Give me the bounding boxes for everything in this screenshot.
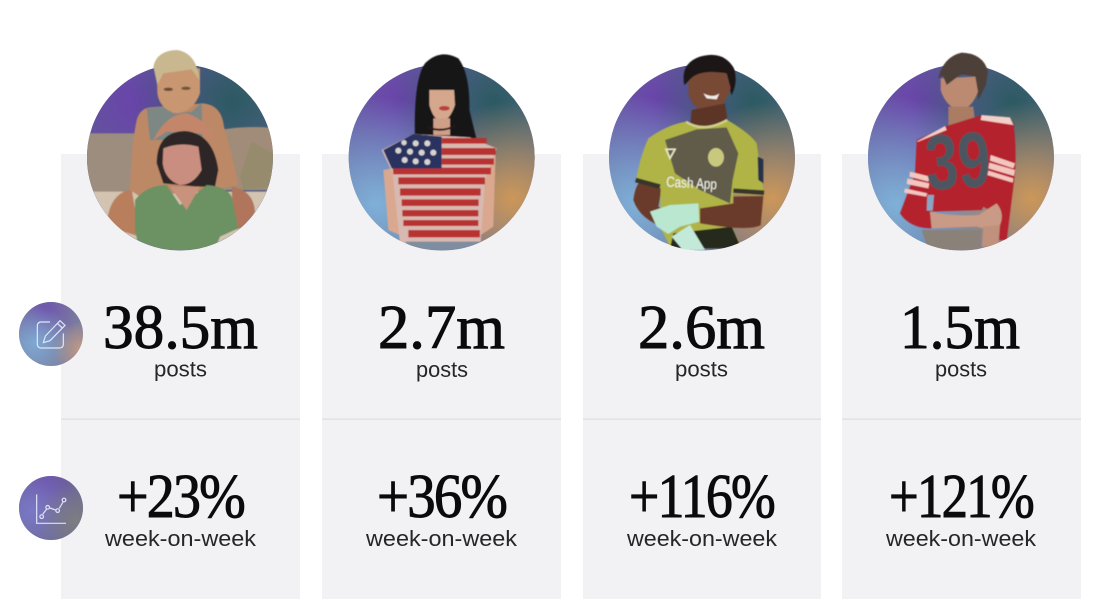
- panel background: [583, 154, 821, 599]
- stat: week-on-week: week-on-week: [626, 526, 778, 551]
- stat: posts: posts: [935, 356, 987, 382]
- panel background: [842, 154, 1081, 599]
- column 3: third trend: [583, 55, 821, 599]
- portrait: woman in red 39 sweater: 39: [922, 115, 993, 207]
- stat: posts: posts: [416, 357, 468, 382]
- portrait: goalkeeper in olive jersey: Cash App: [666, 175, 717, 193]
- portrait: model in flag top: [349, 54, 535, 250]
- stat: week-on-week: [626, 463, 778, 551]
- stat: week-on-week: +36%: [377, 463, 506, 531]
- panel background: [322, 154, 561, 599]
- stat: posts: 38.5m: [103, 294, 258, 362]
- stat: posts: 2.7m: [378, 294, 505, 362]
- portrait: two women on a sofa: [85, 50, 277, 257]
- stat: week-on-week: [885, 463, 1037, 551]
- stat: week-on-week: week-on-week: [104, 526, 257, 551]
- stat: posts: posts: [154, 356, 207, 382]
- column 2: second trend: [322, 54, 561, 599]
- stat: week-on-week: week-on-week: [885, 526, 1037, 551]
- portrait: woman in red 39 sweater: [868, 53, 1054, 251]
- stat: week-on-week: +121%: [889, 463, 1033, 531]
- icon: pencil on note (posts row): [19, 302, 83, 366]
- stat: week-on-week: +116%: [629, 463, 774, 531]
- portrait: goalkeeper in olive jersey: [609, 55, 795, 251]
- stat: posts: posts: [675, 356, 728, 382]
- stat: posts: 1.5m: [900, 294, 1020, 362]
- icon: line chart (week-on-week row): [19, 476, 83, 540]
- stat: week-on-week: week-on-week: [365, 526, 518, 551]
- panel background: [61, 154, 300, 599]
- column 1: first trend: [61, 50, 300, 599]
- stat: week-on-week: +23%: [117, 463, 244, 531]
- column 4: fourth trend: [842, 53, 1081, 599]
- stat: posts: 2.6m: [638, 294, 765, 362]
